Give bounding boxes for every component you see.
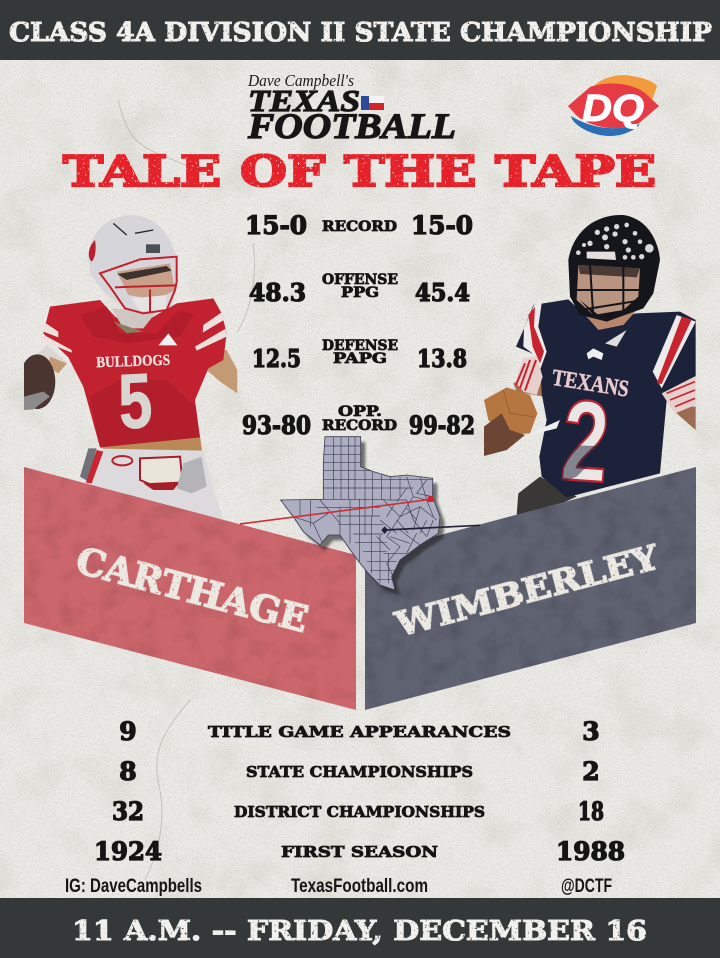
- team name: Wimberley: WIMBERLEY: [391, 537, 664, 645]
- history row: state championships: 2: [582, 757, 600, 786]
- stat row: defense papg: [252, 338, 467, 373]
- panel: Wimberley: [365, 467, 696, 710]
- history row: district championships: [112, 797, 604, 826]
- logo: DQ: [568, 75, 659, 136]
- connector: Wimberley: [385, 525, 480, 530]
- logo: Dave Campbell's Texas Football: [247, 71, 456, 146]
- history row: state championships: 8: [119, 757, 137, 786]
- stat row: offense ppg: 48.3: [249, 278, 306, 307]
- history row: first season: 1924: [94, 837, 162, 866]
- stat row: record: 15-0: [245, 211, 307, 240]
- helmet: [88, 215, 178, 312]
- player: Wimberley quarterback: 2: [558, 376, 613, 507]
- stat row: defense papg: DEFENSE: [322, 338, 398, 354]
- banner title: CLASS 4A DIVISION II STATE CHAMPIONSHIP: [9, 18, 712, 48]
- stat row: record: RECORD: [322, 219, 397, 235]
- neck: [112, 308, 157, 328]
- team name: Carthage: CARTHAGE: [72, 540, 312, 641]
- logo: Dave Campbell's Texas Football: TEXAS: [248, 83, 360, 118]
- top banner: [0, 0, 720, 60]
- history row: first season: 1988: [556, 837, 625, 866]
- helmet: [568, 215, 660, 322]
- logo: Dave Campbell's Texas Football: Dave Campbell's: [247, 71, 354, 90]
- pants: [83, 448, 224, 520]
- connector: Carthage: [240, 499, 431, 524]
- stat row: opponent record: RECORD: [322, 418, 397, 434]
- game time: 11 A.M. -- FRIDAY, DECEMBER 16: [72, 916, 647, 947]
- social handles: @DCTF: [561, 876, 612, 897]
- pants: [517, 477, 577, 515]
- logo: DQ: DQ: [582, 88, 644, 130]
- history row: first season: FIRST SEASON: [281, 843, 438, 861]
- history row: district championships: 18: [578, 797, 604, 826]
- jersey text: BULLDOGS: [96, 352, 170, 371]
- stat row: opponent record: 93-80: [242, 411, 311, 440]
- neck: [587, 310, 637, 330]
- bottom banner: [0, 898, 720, 958]
- panel: Carthage: [24, 467, 356, 710]
- stat row: defense papg: PAPG: [333, 351, 387, 367]
- football: [484, 387, 537, 435]
- social handles: TexasFootball.com: [291, 876, 428, 897]
- stat row: record: 15-0: [411, 211, 473, 240]
- logo: Dave Campbell's Texas Football: FOOTBALL: [247, 106, 456, 146]
- history row: title game appearances: 3: [582, 717, 600, 746]
- history row: state championships: [119, 757, 600, 786]
- main title: TALE OF THE TAPE: [63, 147, 656, 197]
- jersey: [516, 299, 696, 497]
- stat row: opponent record: OPP.: [338, 404, 382, 420]
- stat row: defense papg: 13.8: [417, 344, 467, 373]
- logo on jersey: [587, 348, 603, 360]
- jersey text: TEXANS: [550, 365, 631, 403]
- history row: title game appearances: 9: [119, 717, 137, 746]
- history row: district championships: DISTRICT CHAMPIONSHIPS: [234, 803, 485, 821]
- history row: district championships: 32: [112, 797, 144, 826]
- social handles: IG: DaveCampbells: [65, 876, 202, 897]
- stat row: offense ppg: PPG: [341, 285, 379, 301]
- history row: title game appearances: [119, 717, 600, 746]
- stripes: [523, 303, 547, 370]
- stat row: opponent record: 99-82: [409, 411, 475, 440]
- stat row: offense ppg: OFFENSE: [322, 272, 398, 288]
- stat row: record: [245, 211, 473, 240]
- player: Carthage quarterback: [19, 215, 237, 520]
- stat row: opponent record: [242, 404, 475, 440]
- player: Carthage quarterback: 5: [116, 358, 154, 446]
- stat row: defense papg: 12.5: [252, 344, 301, 373]
- map: Texas with team locations: [240, 437, 480, 595]
- history row: state championships: STATE CHAMPIONSHIPS: [246, 763, 473, 781]
- arms: [673, 407, 696, 430]
- hand: [484, 413, 525, 456]
- history row: first season: [94, 837, 625, 866]
- torso skin: [100, 436, 202, 451]
- stat row: offense ppg: 45.4: [415, 278, 470, 307]
- helmet stars: [576, 223, 654, 260]
- social handles: [65, 876, 612, 897]
- stat row: offense ppg: [249, 272, 470, 307]
- history row: title game appearances: TITLE GAME APPEARANCES: [208, 723, 511, 741]
- jersey: [43, 298, 227, 447]
- player: Wimberley quarterback: [484, 215, 696, 515]
